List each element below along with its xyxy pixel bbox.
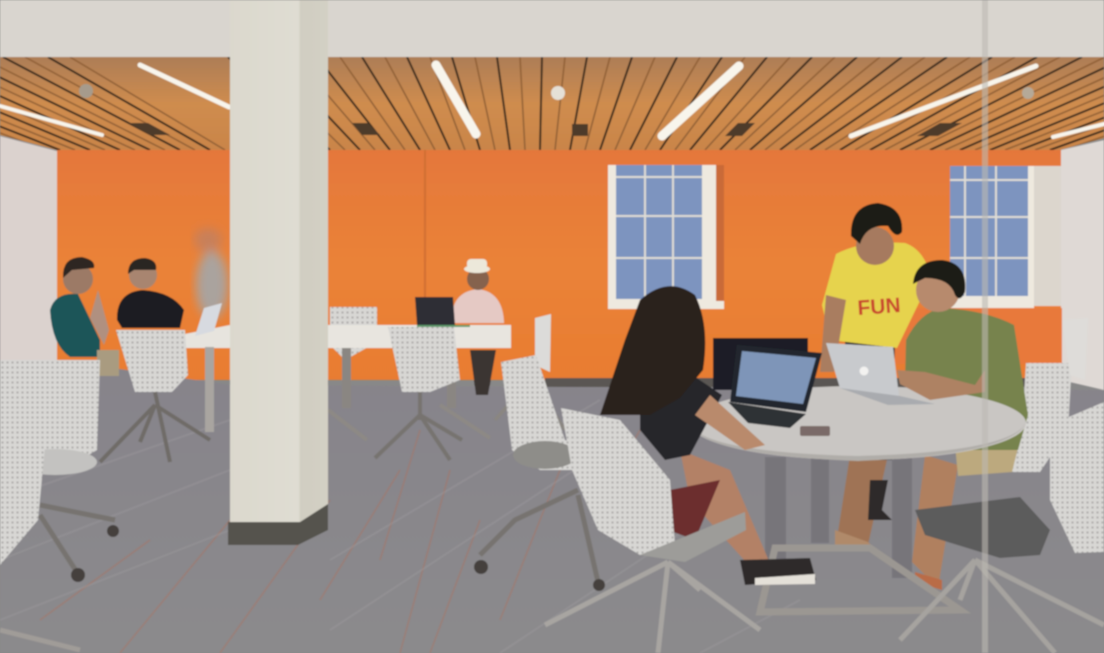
laptop: rear centre xyxy=(415,297,470,327)
monitor behind table xyxy=(713,338,808,390)
right wall xyxy=(1061,140,1104,390)
person: man in black shirt xyxy=(117,258,184,328)
shirt lettering: FUN xyxy=(857,294,901,320)
left wall xyxy=(0,136,57,360)
window: right xyxy=(950,166,1034,308)
person: man in white hat xyxy=(452,259,504,395)
chair: mid foreground back xyxy=(474,355,605,591)
person: standing man in yellow shirt xyxy=(820,203,931,552)
ceiling vents xyxy=(128,123,962,136)
person: blurred walker xyxy=(194,228,228,319)
glass mullion xyxy=(982,0,988,653)
ceiling xyxy=(0,57,1104,152)
baseboard xyxy=(545,378,1065,387)
table: left rear xyxy=(180,325,230,432)
window: centre xyxy=(608,165,724,309)
floor xyxy=(0,360,1104,653)
laptop: black front xyxy=(728,345,822,428)
arm: green polo man xyxy=(897,370,985,400)
laptop: silver apple xyxy=(826,343,935,405)
chair: foreground centre xyxy=(545,408,760,653)
chair: far left foreground xyxy=(0,406,80,650)
chair: white rear centre xyxy=(375,327,462,460)
round table xyxy=(690,386,1026,612)
chair: left group centre xyxy=(100,330,210,462)
phone on table xyxy=(800,426,830,436)
chair: rear small xyxy=(495,314,565,430)
ceiling lights xyxy=(0,65,1104,137)
person: man in teal shirt xyxy=(50,257,119,376)
laptop: left rear xyxy=(195,303,222,336)
chair: left large xyxy=(0,360,119,582)
chair: rear behind centre table xyxy=(330,307,377,360)
soffit xyxy=(0,0,1104,58)
back wall xyxy=(57,150,1061,380)
column xyxy=(228,0,328,545)
chair: behind green polo man xyxy=(995,318,1088,472)
table: centre rear xyxy=(328,325,511,440)
person: woman with long hair seated xyxy=(600,286,816,585)
person: man in green polo body xyxy=(905,260,1028,590)
chair: foreground right xyxy=(900,402,1104,653)
